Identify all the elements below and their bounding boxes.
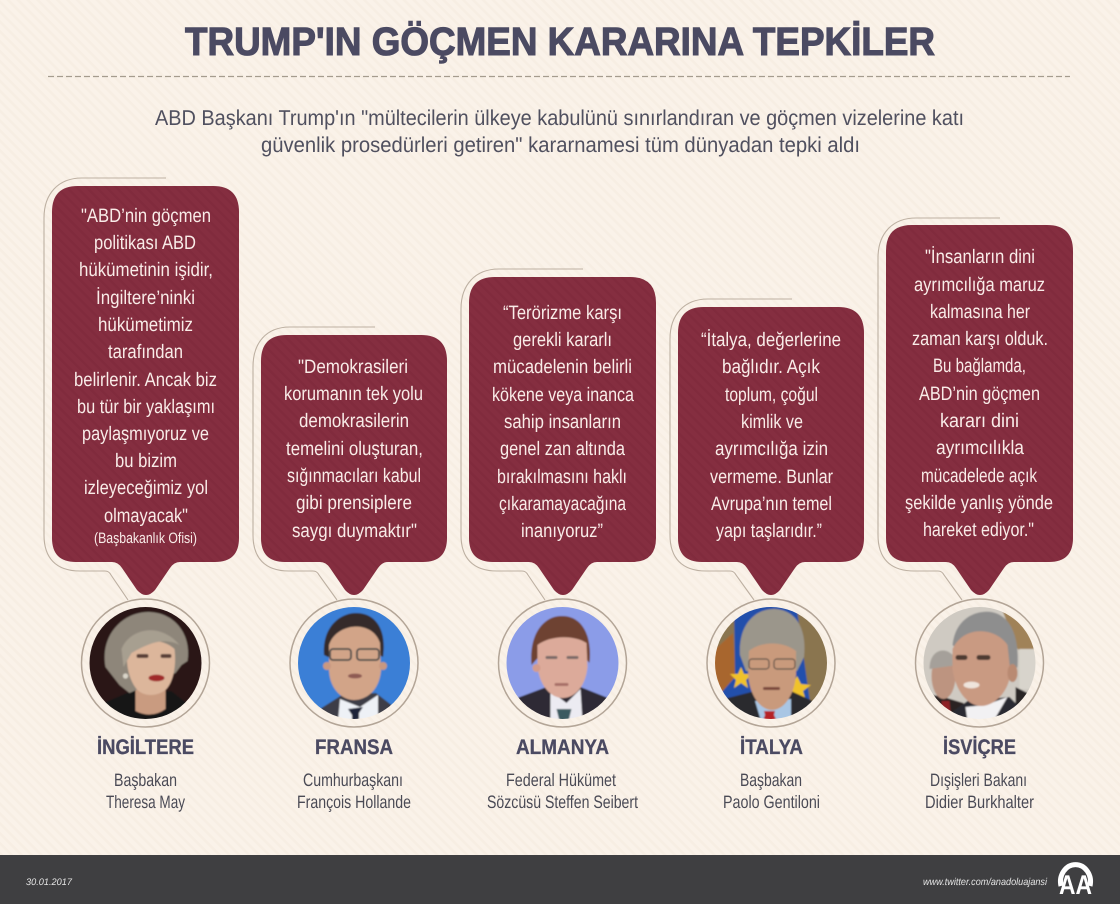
quote text: İngiltere’ninki [96,287,195,309]
panel: İsviçre [878,218,1073,812]
panel: Fransa [253,327,447,812]
quote text [284,356,423,542]
twitter address: www.twitter.com/anadoluajansi [923,877,1048,888]
portrait: Steffen Seibert [498,599,626,727]
date: 30.01.2017 [26,877,73,888]
footer bar [0,855,1120,904]
quote text: vermeme. Bunlar [710,466,833,488]
quote text [905,246,1053,541]
speech bubble [678,307,864,595]
panel: İtalya [670,299,864,812]
quote text: kökene veya inanca [492,384,634,406]
role and name: Didier Burkhalter [925,792,1034,812]
bubble outline [253,327,375,600]
quote text: inanıyoruz” [521,520,603,542]
role and name: Dışişleri Bakanı [930,770,1027,790]
quote text: "Demokrasileri [298,356,408,378]
portrait: François Hollande [290,599,418,727]
speech bubble [261,335,447,595]
subtitle text block [155,106,964,157]
quote text: yapı taşlarıdır.” [716,520,822,542]
quote text: “İtalya, değerlerine [701,329,841,351]
quote text: çıkaramayacağına [499,493,626,515]
quote text: genel zan altında [500,438,625,460]
country heading: FRANSA [315,736,393,759]
quote text: politikası ABD [94,232,196,254]
quote text: kimlik ve [741,411,803,433]
quote text: izleyeceğimiz yol [84,477,208,499]
role and name: Cumhurbaşkanı [303,770,403,790]
quote text: sığınmacıları kabul [287,465,421,487]
role and name [723,770,820,812]
panel: Almanya [461,269,656,812]
portrait: Paolo Gentiloni [707,599,835,727]
quote text: bu tür bir yaklaşımı [77,396,215,418]
quote text: “Terörizme karşı [503,302,622,324]
quote text: kalmasına her [930,301,1030,323]
quote text: gerekli kararlı [513,329,612,351]
quote text: olmayacak" [104,505,188,527]
country heading: İNGİLTERE [97,736,194,759]
subtitle text block: ABD Başkanı Trump'ın "mültecilerin ülkeye kabulünü sınırlandıran ve göçmen vizelerine katı [155,106,964,130]
role and name [106,770,185,812]
icon: AA logo: AA [1059,870,1092,900]
quote text: temelini oluşturan, [286,438,423,460]
quote text: ayrımcılıkla [936,437,1024,459]
quote text: hareket ediyor." [923,519,1034,541]
portrait: Theresa May [82,599,210,727]
quote text: zaman karşı olduk. [912,328,1048,350]
quote text: bu bizim [115,450,177,472]
role and name: Paolo Gentiloni [723,792,820,812]
quote text: ayrımcılığa maruz [914,274,1045,296]
role and name: Başbakan [114,770,177,790]
role and name [487,770,638,812]
quote text: Avrupa’nın temel [711,493,832,515]
quote text [74,205,217,547]
role and name [925,770,1034,812]
country heading: İTALYA [740,736,803,759]
quote text: mücadelede açık [921,465,1037,487]
country heading: ALMANYA [516,736,609,759]
quote text: hükümetinin işidir, [79,259,213,281]
quote text: tarafından [108,341,183,363]
speech bubble [886,225,1073,595]
quote text: bağlıdır. Açık [722,356,820,378]
panel: İngiltere [44,178,239,812]
subtitle text block: güvenlik prosedürleri getiren" kararnamesi tüm dünyadan tepki aldı [261,133,860,157]
country heading: İSVİÇRE [943,736,1016,759]
quote text: sahip insanların [504,411,621,433]
quote text: şekilde yanlış yönde [905,492,1053,514]
quote text: (Başbakanlık Ofisi) [94,530,197,547]
bubble outline [44,178,166,600]
quote text: demokrasilerin [299,410,409,432]
role and name [297,770,411,812]
quote text: "ABD’nin göçmen [81,205,211,227]
role and name: Federal Hükümet [506,770,616,790]
quote text [492,302,634,542]
role and name: Sözcüsü Steffen Seibert [487,792,638,812]
quote text: ABD’nin göçmen [919,383,1040,405]
quote text: belirlenir. Ancak biz [74,369,217,391]
portrait: Didier Burkhalter [916,599,1044,727]
quote text [701,329,841,542]
speech bubble [469,277,656,595]
role and name: François Hollande [297,792,411,812]
quote text: gibi prensiplere [296,492,412,514]
bubble outline [878,218,1000,600]
quote text: hükümetimiz [98,314,193,336]
quote text: saygı duymaktır" [292,520,417,542]
quote text: korumanın tek yolu [284,383,423,405]
role and name: Theresa May [106,792,185,812]
quote text: ayrımcılığa izin [715,438,828,460]
role and name: Başbakan [740,770,802,790]
quote text: Bu bağlamda, [933,355,1026,377]
title: TRUMP'IN GÖÇMEN KARARINA TEPKİLER [185,20,935,64]
quote text: kararı dini [940,410,1019,432]
speech bubble [52,186,239,595]
bubble outline [670,299,792,600]
quote text: paylaşmıyoruz ve [82,423,209,445]
quote text: toplum, çoğul [725,384,818,406]
quote text: mücadelenin belirli [493,356,632,378]
quote text: "İnsanların dini [925,246,1035,268]
bubble outline [461,269,583,600]
quote text: bırakılmasını haklı [497,466,627,488]
